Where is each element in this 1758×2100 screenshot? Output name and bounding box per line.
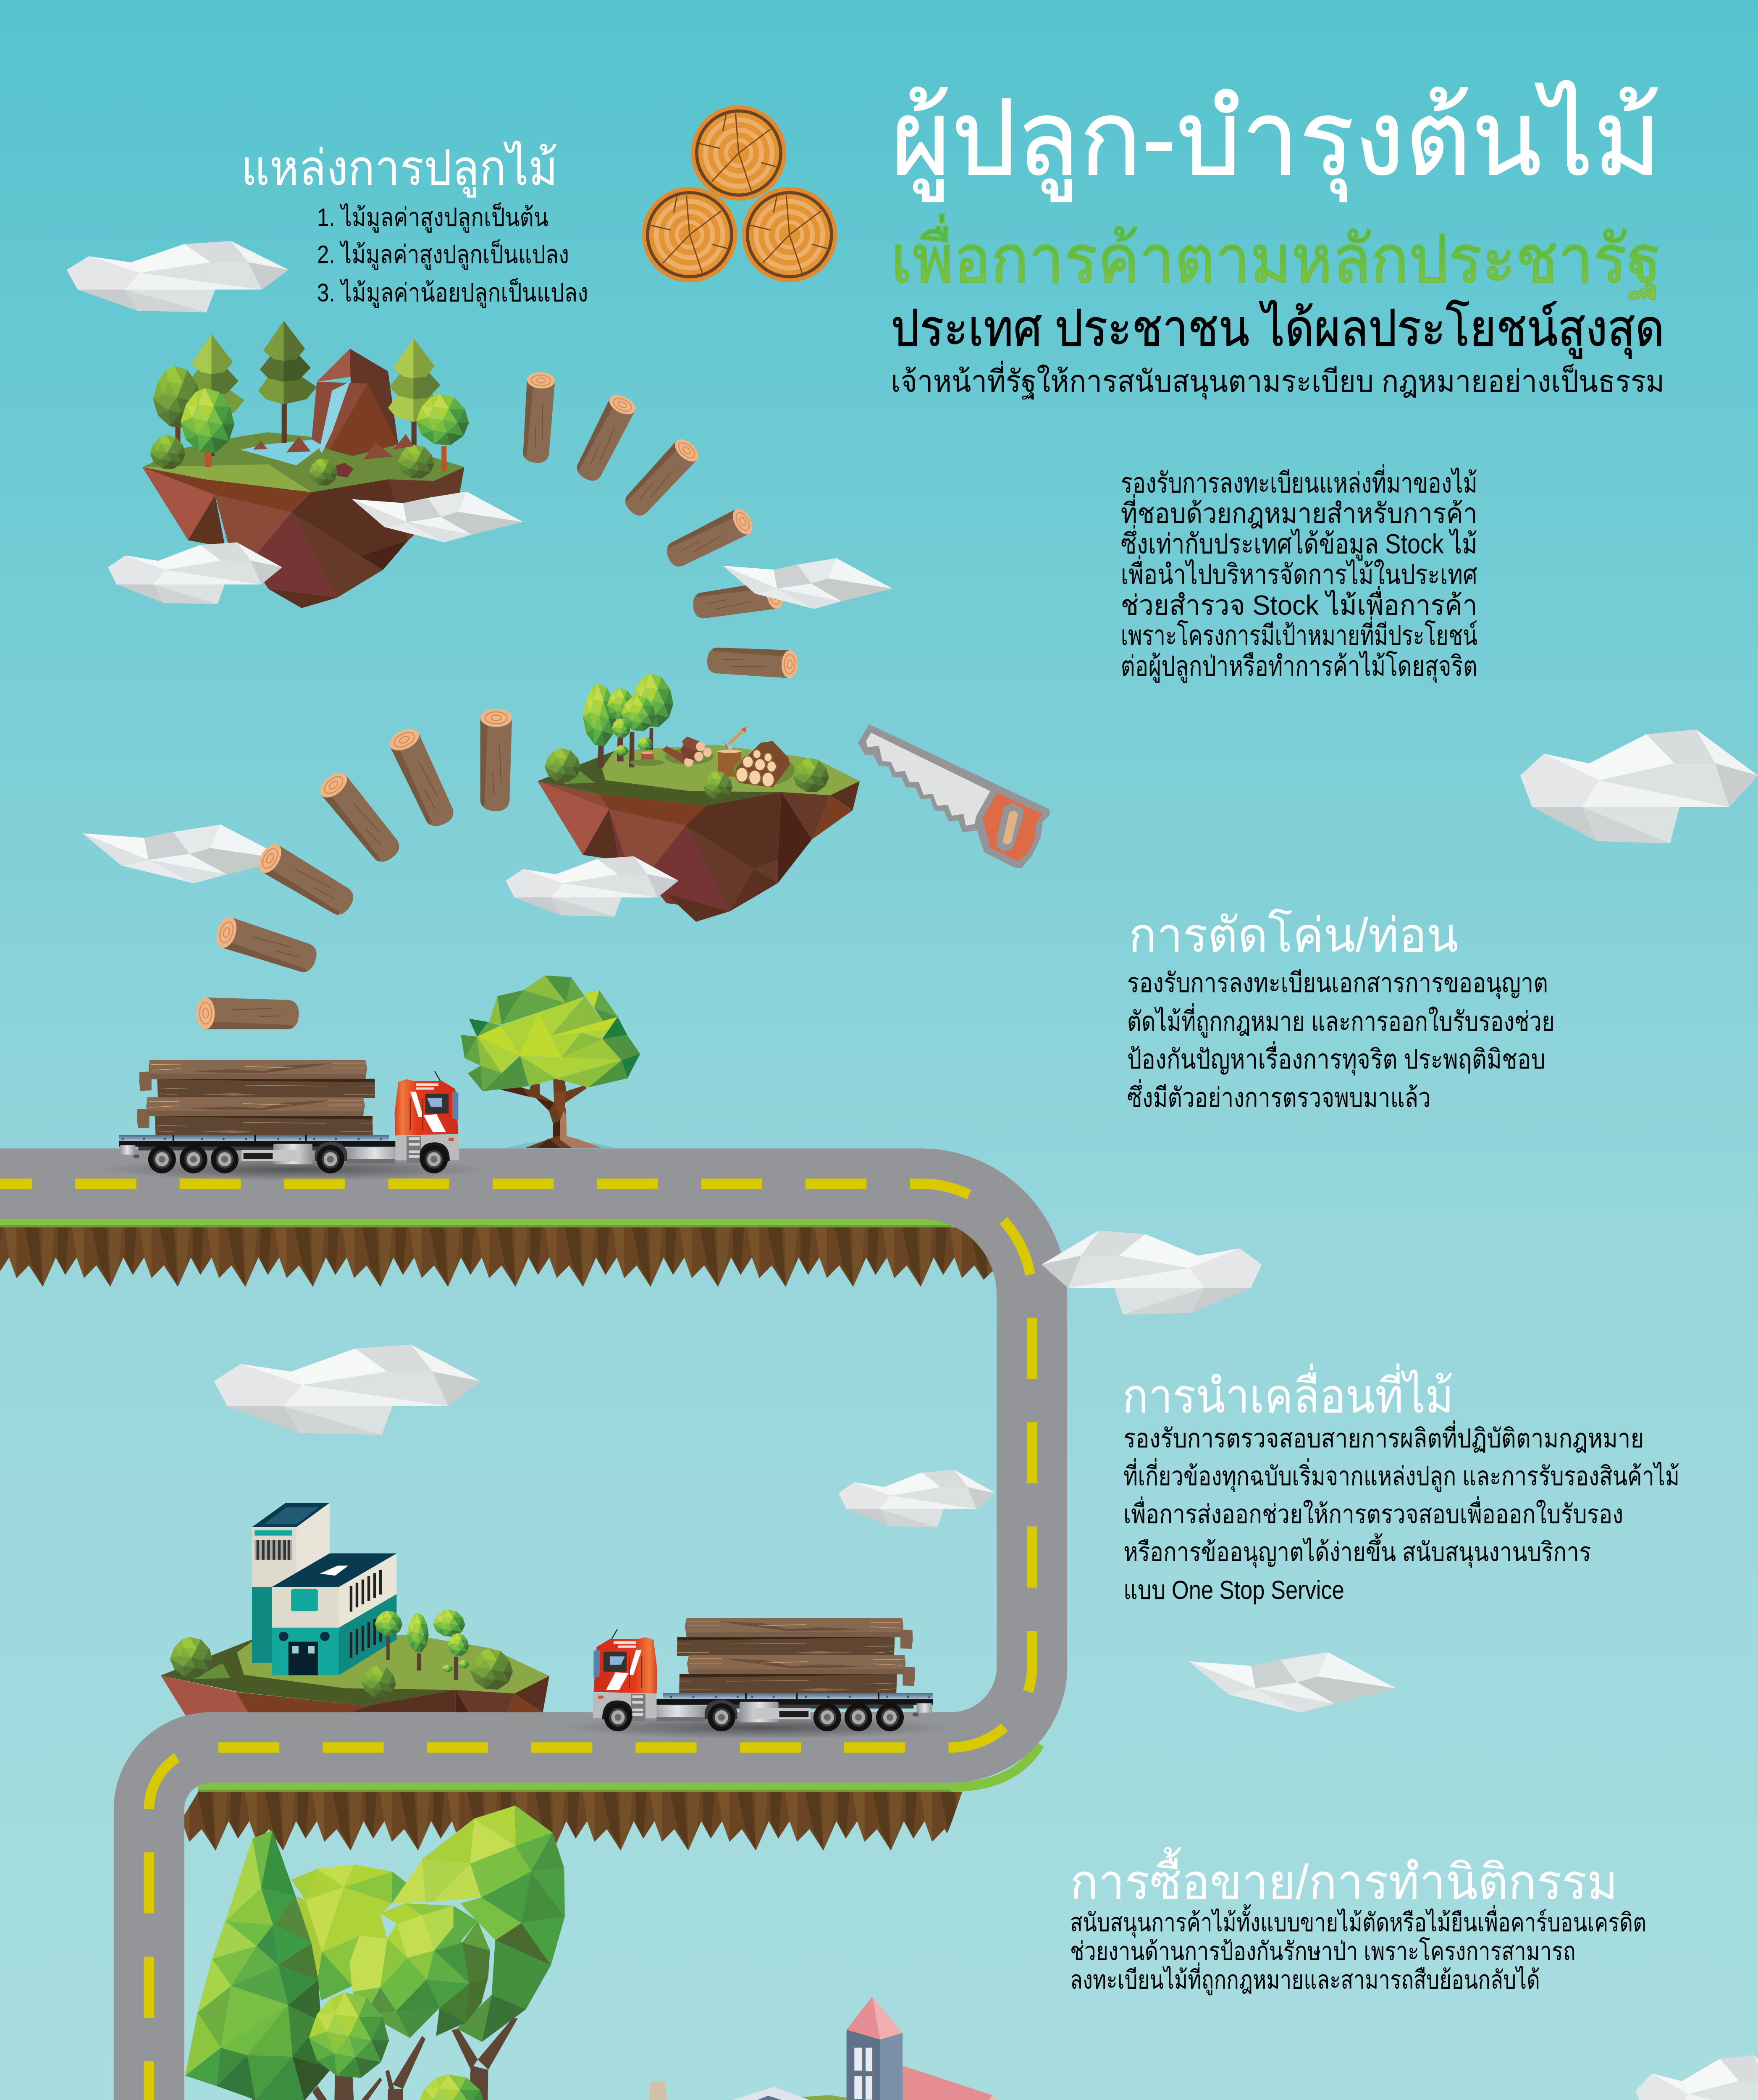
cloud — [1189, 1652, 1396, 1713]
heading: trade: การซื้อขาย/การทำนิติกรรม — [1070, 1847, 1618, 1910]
tree C front lobe — [349, 1903, 490, 2038]
panel: cutting section — [1127, 908, 1555, 1113]
tree crown — [461, 976, 640, 1091]
earth spikes under road 2 — [184, 1792, 962, 1855]
trees — [150, 321, 469, 486]
tree trunks — [211, 2018, 518, 2100]
panel: trade section — [1070, 1847, 1646, 1995]
panel: registration text — [1121, 464, 1477, 683]
town on bottom island — [536, 1996, 1155, 2100]
floating island: forest with waterfall — [142, 321, 469, 608]
paragraph: transport: เพื่อการส่งออกช่วยให้การตรวจสอบเพื่อออกใบรับรอง — [1123, 1496, 1623, 1529]
bushes — [544, 748, 829, 800]
paragraph: transport: รองรับการตรวจสอบสายการผลิตที่ปฏิบัติตามกฎหมาย — [1123, 1420, 1644, 1453]
tree A — [185, 1830, 331, 2100]
low-poly tree beside road — [461, 976, 640, 1148]
paragraph: transport — [1123, 1420, 1679, 1605]
tree ground shadow — [504, 1141, 616, 1148]
floating island: factory building — [161, 1503, 549, 1719]
tree trunk — [500, 1079, 602, 1148]
pink house — [706, 2087, 819, 2100]
paragraph: trade — [1070, 1904, 1646, 1995]
stacked firewood — [733, 741, 795, 788]
island cliff — [161, 1675, 549, 1719]
floating island: logging site — [538, 674, 860, 922]
cloud — [352, 491, 523, 542]
factory building — [252, 1503, 396, 1675]
cut logs — [630, 736, 714, 766]
island ground — [161, 1635, 549, 1706]
title: line 2: เพื่อการค้าตามหลักประชารัฐ — [891, 214, 1661, 300]
pink-roofed hall — [903, 2066, 1015, 2100]
mountain with waterfall — [312, 349, 398, 456]
paragraph: trade: ลงทะเบียนไม้ที่ถูกกฎหมายและสามารถสืบย้อนกลับได้ — [1070, 1962, 1540, 1995]
cloud — [82, 824, 289, 883]
list: planting types: 1. ไม้มูลค่าสูงปลูกเป็นต้น — [317, 202, 548, 233]
cloud — [1636, 2055, 1758, 2100]
title: line 4: เจ้าหน้าที่รัฐให้การสนับสนุนตามระเบียบ กฎหมายอย่างเป็นธรรม — [891, 361, 1664, 400]
tree B — [291, 1864, 407, 2000]
title: line 1: ผู้ปลูก-บำรุงต้นไม้ — [891, 79, 1661, 202]
panel: registration text: เพราะโครงการมีเป้าหมายที่มีประโยชน์ — [1121, 616, 1477, 651]
winding road — [0, 1184, 1127, 2100]
tree stump — [637, 751, 660, 766]
panel: registration text: ช่วยสำรวจ Stock ไม้เพื่อการค้า — [1121, 586, 1477, 620]
panel: registration text: เพื่อนำไปบริหารจัดการไม้ในประเทศ — [1121, 556, 1477, 590]
panel: transport section — [1122, 1363, 1679, 1605]
panel: registration text: ต่อผู้ปลูกป่าหรือทำการค้าไม้โดยสุจริต — [1121, 650, 1477, 683]
falling logs: upper arc — [523, 372, 798, 678]
paragraph: cutting: ตัดไม้ที่ถูกกฎหมาย และการออกใบรับรองช่วย — [1127, 1003, 1555, 1038]
list: planting types: 3. ไม้มูลค่าน้อยปลูกเป็นแปลง — [317, 278, 588, 308]
icon: hand saw — [858, 724, 1050, 868]
trees — [583, 674, 673, 767]
tree C — [392, 1806, 565, 2042]
cloud — [839, 1470, 995, 1528]
paragraph: trade: สนับสนุนการค้าไม้ทั้งแบบขายไม้ตัดหรือไม้ยืนเพื่อคาร์บอนเครดิต — [1070, 1904, 1646, 1938]
green strips under road — [0, 1223, 1040, 1791]
title: line 3: ประเทศ ประชาชน ได้ผลประโยชน์สูงสุด — [891, 300, 1664, 359]
heading: transport: การนำเคลื่อนที่ไม้ — [1122, 1363, 1454, 1423]
cloud — [214, 1345, 480, 1435]
island cliff — [142, 467, 464, 608]
cloud — [506, 856, 679, 917]
heading: cutting: การตัดโค่น/ท่อน — [1128, 908, 1459, 961]
chopping stump with axe — [718, 727, 746, 777]
title block — [891, 79, 1664, 400]
paragraph: cutting — [1127, 968, 1555, 1113]
falling logs: lower arc — [197, 709, 512, 1029]
island ground — [538, 745, 860, 806]
trees and bushes — [170, 1609, 513, 1698]
list: planting types: 2. ไม้มูลค่าสูงปลูกเป็นแปลง — [317, 240, 569, 270]
cloud — [1520, 730, 1758, 843]
list: planting types — [317, 202, 588, 308]
small trees — [309, 1992, 485, 2100]
island cliff — [538, 781, 860, 922]
tall tower — [847, 1996, 903, 2100]
paragraph: transport: หรือการข้ออนุญาตได้ง่ายขึ้น สนับสนุนงานบริการ — [1123, 1533, 1591, 1568]
paragraph: cutting: รองรับการลงทะเบียนเอกสารการขออนุญาต — [1127, 968, 1548, 999]
earth spikes under road 1 — [0, 1227, 995, 1292]
paragraph: trade: ช่วยงานด้านการป้องกันรักษาป่า เพราะโครงการสามารถ — [1070, 1937, 1576, 1966]
truck with logs: second road — [563, 1618, 953, 1739]
island ground — [142, 432, 464, 492]
cloud — [723, 558, 892, 609]
panel: registration text: รองรับการลงทะเบียนแหล่งที่มาของไม้ — [1121, 464, 1477, 498]
mill with stepped roof — [536, 2082, 708, 2100]
cloud — [1042, 1231, 1262, 1315]
paragraph: cutting: ป้องกันปัญหาเรื่องการทุจริต ประพฤติมิชอบ — [1127, 1041, 1545, 1076]
paragraph: cutting: ซึ่งมีตัวอย่างการตรวจพบมาแล้ว — [1127, 1079, 1431, 1113]
big low-poly trees — [185, 1806, 565, 2100]
truck with logs: first road — [99, 1060, 489, 1181]
cloud — [67, 241, 289, 312]
panel: planting sources text — [241, 140, 588, 308]
panel: registration text: ซึ่งเท่ากับประเทศได้ข้อมูล Stock ไม้ — [1121, 525, 1477, 561]
paragraph: transport: แบบ One Stop Service — [1123, 1576, 1344, 1605]
cloud — [108, 542, 282, 604]
panel: registration text: ที่ชอบด้วยกฎหมายสำหรับการค้า — [1121, 494, 1477, 529]
island ground — [0, 2095, 1527, 2100]
bottom floating island base — [0, 2095, 1527, 2100]
heading: planting sources: แหล่งการปลูกไม้ — [241, 140, 558, 198]
icon: three log cross-sections — [642, 105, 837, 282]
